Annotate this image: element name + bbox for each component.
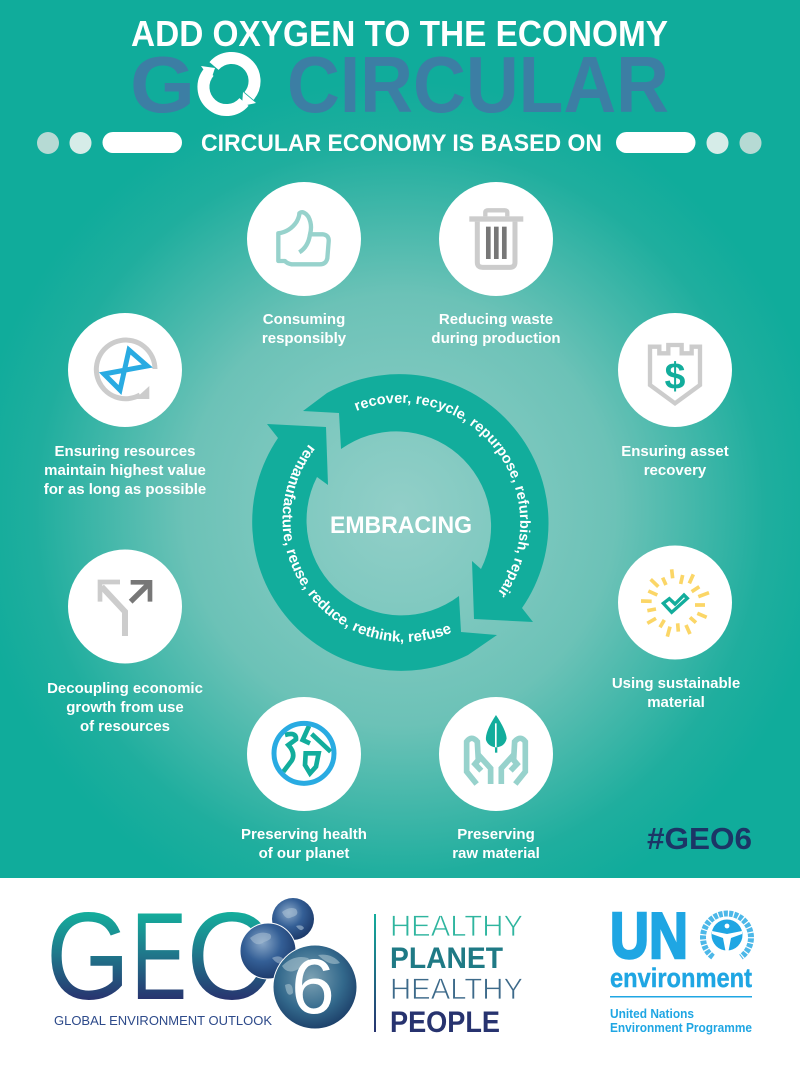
divider [374, 914, 376, 1032]
item: ensuring resources: maintain highest value [44, 462, 206, 479]
item: preserving health: of our planet [259, 845, 349, 862]
icon: hourglass cycle [96, 340, 155, 399]
item: ensuring asset recovery: Ensuring asset [621, 443, 729, 460]
icon: large globe with 6 [273, 942, 357, 1030]
icon: small globe [272, 898, 314, 940]
slogan: PLANET [390, 942, 503, 975]
item: reducing waste [431, 182, 561, 347]
arrow: bottom left [252, 424, 497, 671]
arrow: top right [303, 374, 549, 622]
slogan: HEALTHY [390, 973, 523, 1006]
item: consuming responsibly [247, 182, 361, 347]
title: go circular [130, 40, 669, 129]
item: ensuring resources [44, 313, 206, 498]
slogan: HEALTHY [390, 910, 523, 943]
item: consuming responsibly: responsibly [262, 330, 347, 347]
icon: thumbs up [278, 212, 329, 264]
logo: UN environment: United Nations [610, 1007, 694, 1021]
icon: medium globe [240, 923, 296, 979]
item: preserving raw material: Preserving [457, 826, 535, 843]
subtitle row: CIRCULAR ECONOMY IS BASED ON [201, 130, 602, 157]
footer panel [0, 878, 800, 1068]
item: decoupling: Decoupling economic [47, 680, 203, 697]
hashtag: #GEO6 [647, 821, 752, 856]
icon: diverging arrows [100, 582, 150, 636]
item: decoupling: of resources [80, 718, 170, 735]
icon: large globe with 6: 6 [291, 942, 335, 1030]
item: ensuring resources: for as long as possible [44, 481, 206, 498]
logo: GEO6 [46, 888, 357, 1030]
item: ensuring resources: Ensuring resources [55, 443, 195, 460]
item: decoupling: growth from use [66, 699, 184, 716]
icon: hands with leaf [467, 715, 525, 784]
item: reducing waste: during production [431, 330, 561, 347]
logo: UN environment: Environment Programme [610, 1021, 752, 1035]
item: preserving health: Preserving health [241, 826, 367, 843]
subtitle row [37, 130, 762, 157]
item: preserving health [241, 697, 367, 862]
item: preserving raw material: raw material [452, 845, 540, 862]
logo: UN environment [610, 899, 752, 1035]
item: sustainable material: Using sustainable [612, 675, 740, 692]
item: reducing waste: Reducing waste [439, 311, 553, 328]
item: consuming responsibly: Consuming [263, 311, 345, 328]
logo: GEO6: GLOBAL ENVIRONMENT OUTLOOK [54, 1014, 273, 1028]
item: sustainable material: material [647, 694, 705, 711]
logo: GEO6: C [186, 888, 272, 1026]
icon: emblem [703, 914, 751, 957]
slogan: PEOPLE [390, 1006, 500, 1039]
title: add oxygen: ADD OXYGEN TO THE ECONOMY [131, 13, 668, 54]
item: ensuring asset recovery [618, 313, 732, 479]
icon: circular arrows O [201, 58, 256, 110]
chart: embracing cycle arrows [252, 374, 548, 671]
slogan [390, 910, 523, 1039]
icon: shield with dollar: $ [665, 354, 686, 396]
item: sustainable material [612, 546, 740, 711]
logo: GEO6: G [46, 888, 130, 1026]
icon: shield with dollar [650, 345, 700, 403]
title: go circular: G [130, 40, 195, 129]
item: ensuring asset recovery: recovery [644, 462, 707, 479]
text: embracing: EMBRACING [330, 512, 472, 539]
logo: UN environment: UN [610, 899, 688, 972]
text: top arrow: recover, recycle, repurpose, refurbish, repair [354, 395, 531, 598]
logo: UN environment: environment [610, 963, 752, 993]
item: decoupling [47, 550, 203, 735]
icon: trash can [469, 210, 523, 267]
title: go circular: CIRCULAR [287, 40, 669, 129]
icon: sunburst check [641, 569, 709, 637]
icon: globe [274, 723, 334, 783]
item: preserving raw material [439, 697, 553, 862]
text: bottom arrow: remanufacture, reuse, reduce, rethink, refuse [282, 444, 451, 644]
logo: GEO6: E [131, 888, 187, 1026]
